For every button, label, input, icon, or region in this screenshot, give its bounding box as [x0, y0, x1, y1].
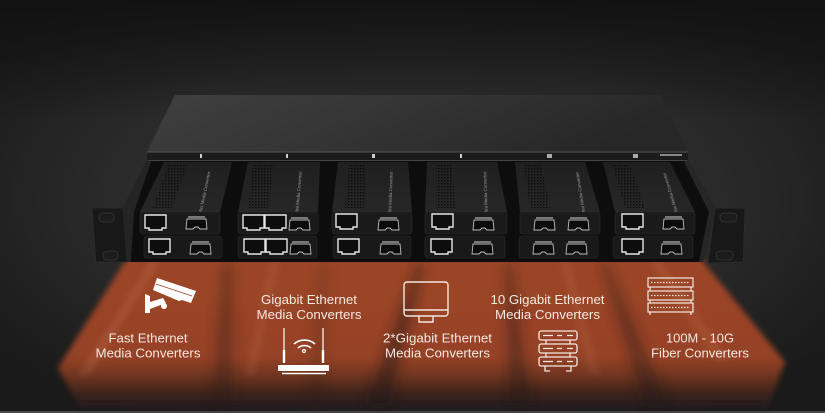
label: 2*Gigabit Ethernet: Media Converters [385, 346, 490, 360]
left ear [92, 208, 127, 262]
label: 10 Gigabit Ethernet [490, 292, 605, 322]
icon: monitor [404, 282, 448, 322]
icon: network switches [648, 278, 693, 315]
icon: server stack [539, 331, 577, 371]
label: Gigabit Ethernet: Gigabit Ethernet [261, 292, 357, 307]
label: 2*Gigabit Ethernet: 2*Gigabit Ethernet [383, 330, 492, 346]
rack interior [123, 160, 715, 262]
top plate [147, 95, 688, 152]
module column 3 [332, 162, 412, 258]
label: 10 Gigabit Ethernet: 10 Gigabit Ethernet [490, 292, 605, 307]
module column 5: Mini Media Converter [575, 171, 586, 215]
module column 6 [603, 162, 695, 258]
label: Fast Ethernet [96, 330, 201, 360]
label: 100M - 10G: 100M - 10G [666, 330, 734, 346]
module column 3: Mini Media Converter [387, 171, 394, 214]
label: Gigabit Ethernet [256, 292, 362, 322]
label: Gigabit Ethernet: Media Converters [256, 307, 362, 322]
icon: wifi router [278, 328, 329, 374]
right side wall [684, 160, 715, 262]
panel: orange light glow [58, 258, 785, 408]
label: Fast Ethernet: Fast Ethernet [108, 330, 188, 346]
front strip with port labels [147, 152, 688, 161]
module column 4: Mini Media Converter [482, 171, 489, 215]
right ear [708, 208, 745, 263]
label: 100M - 10G [651, 330, 750, 360]
label: 10 Gigabit Ethernet: Media Converters [495, 307, 600, 322]
label: 2*Gigabit Ethernet [383, 330, 492, 360]
label: 100M - 10G: Fiber Converters [651, 346, 750, 360]
rack chassis [92, 95, 745, 263]
module column 1: Mini Media Converter [198, 171, 212, 214]
module column 4 [425, 162, 507, 258]
icon: security camera [145, 278, 196, 313]
module column 6: Mini Media Converter [662, 172, 679, 215]
module column 2 [238, 162, 320, 258]
module column 5 [515, 162, 600, 258]
module column 2: Mini Media Converter [294, 171, 303, 214]
module column 1 [140, 162, 232, 258]
label: Fast Ethernet: Media Converters [96, 346, 201, 360]
left side wall [123, 160, 151, 262]
